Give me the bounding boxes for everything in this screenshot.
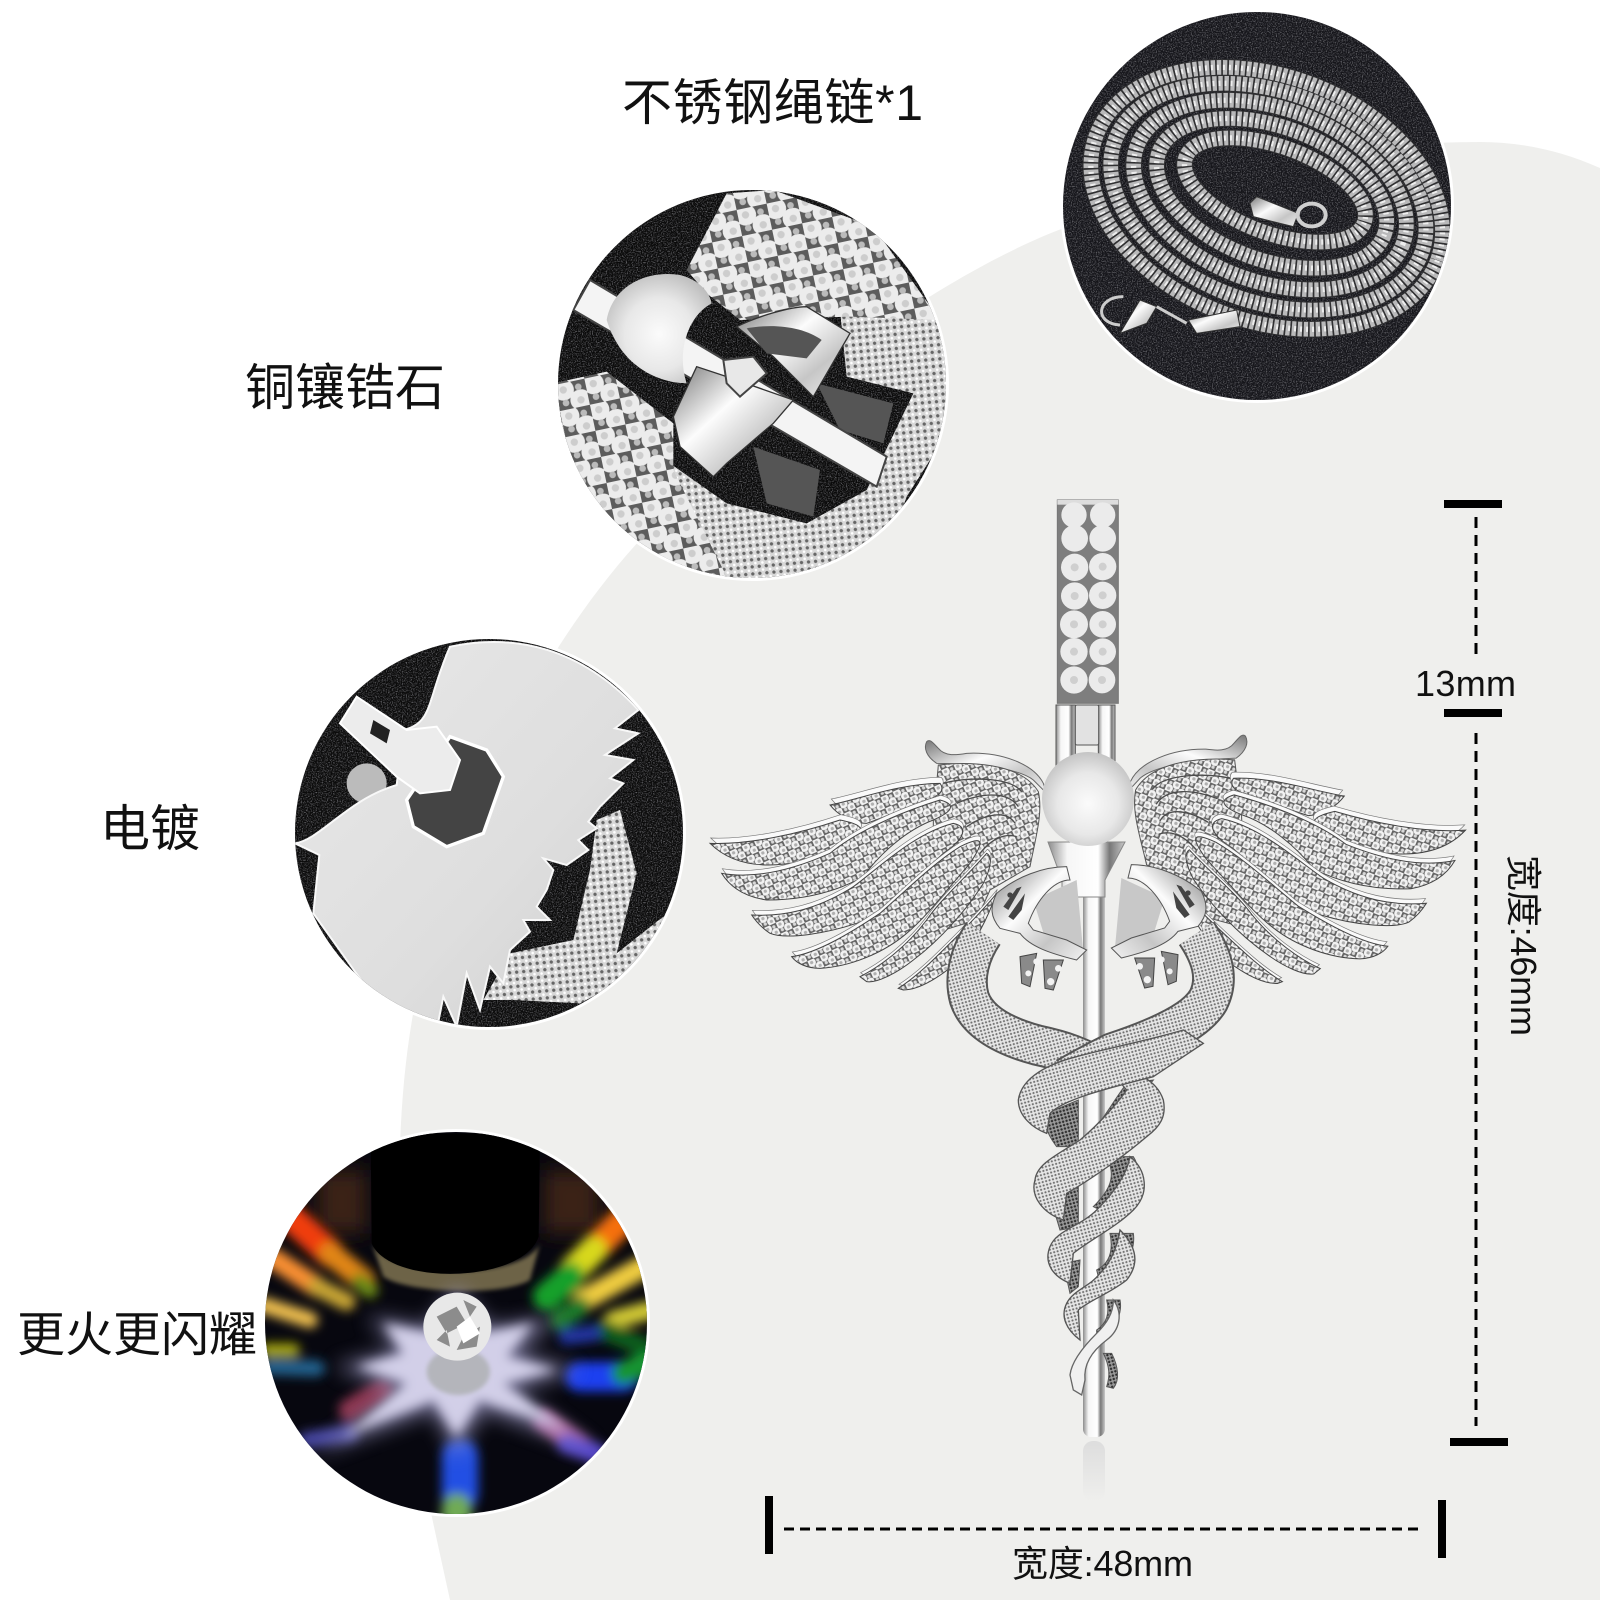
title: stainless rope chain: 不锈钢绳链*1 — [622, 75, 923, 131]
star glare halo — [310, 1287, 600, 1457]
clasp: inner end — [1250, 197, 1326, 227]
cylinder — [371, 1133, 540, 1274]
lower snake head — [673, 367, 793, 477]
lower dark gems — [753, 383, 893, 517]
height dimension: 13mm — [1415, 500, 1516, 717]
label: copper with zircon: 铜镶锆石 — [245, 360, 445, 416]
pearl behind — [347, 763, 387, 803]
panel: plating detail photo — [292, 636, 686, 1030]
tail tip — [1070, 1300, 1119, 1395]
white star glare — [343, 1297, 567, 1437]
panel: rope chain photo — [1054, 9, 1479, 404]
width dimension: 48mm: 宽度:48mm — [1012, 1543, 1193, 1584]
snake skin — [483, 810, 667, 1003]
head hollow — [747, 326, 822, 358]
right wing — [1125, 727, 1471, 988]
lower wing gems — [553, 372, 730, 583]
left wing — [710, 741, 1047, 990]
shaft — [1083, 880, 1105, 1437]
label: more fire and sparkle: 更火更闪耀 — [17, 1309, 257, 1362]
rod — [573, 280, 887, 487]
label: plating: 电镀 — [100, 801, 200, 857]
diamond — [423, 1293, 491, 1361]
pearl — [607, 274, 712, 383]
clasp: lobster end — [1102, 297, 1240, 333]
right snake body — [1067, 933, 1213, 1078]
spiral top front strand — [1018, 1030, 1203, 1133]
inner neck coils — [723, 357, 767, 397]
pearl — [1042, 752, 1134, 846]
polished wing — [295, 642, 638, 1030]
left snake head — [992, 867, 1087, 990]
bail with gems — [1057, 500, 1118, 703]
width dimension: 48mm — [765, 1496, 1446, 1584]
snake skin fill — [657, 310, 953, 590]
rope chain coils — [1082, 59, 1450, 338]
upper wing gems — [687, 190, 940, 320]
background swoosh — [399, 142, 1600, 1600]
right snake head — [1111, 865, 1206, 988]
height dimension: 13mm: 13mm — [1415, 663, 1516, 704]
height dimension: 46mm — [1450, 733, 1544, 1446]
reflection under rod — [1083, 1441, 1105, 1501]
upper snake head — [737, 307, 850, 397]
panel: diamond sparkle photo — [262, 1129, 652, 1520]
height dimension: 46mm: 宽度:46mm — [1503, 855, 1544, 1036]
colour streaks — [263, 1217, 650, 1517]
bail loop — [340, 697, 460, 793]
panel: zircon detail photo — [553, 187, 953, 590]
diamond reflection — [427, 1348, 490, 1395]
left snake body — [967, 933, 1107, 1073]
spiral right loop and diagonal — [1034, 1067, 1164, 1340]
bail gap — [370, 720, 390, 743]
pendant — [710, 500, 1471, 1501]
side glows — [317, 1170, 600, 1233]
wing opening — [407, 737, 503, 847]
cylinder base — [372, 1243, 540, 1291]
bail link — [1056, 705, 1115, 768]
spiral back strands — [1045, 1080, 1153, 1388]
cone collar — [1048, 842, 1125, 897]
